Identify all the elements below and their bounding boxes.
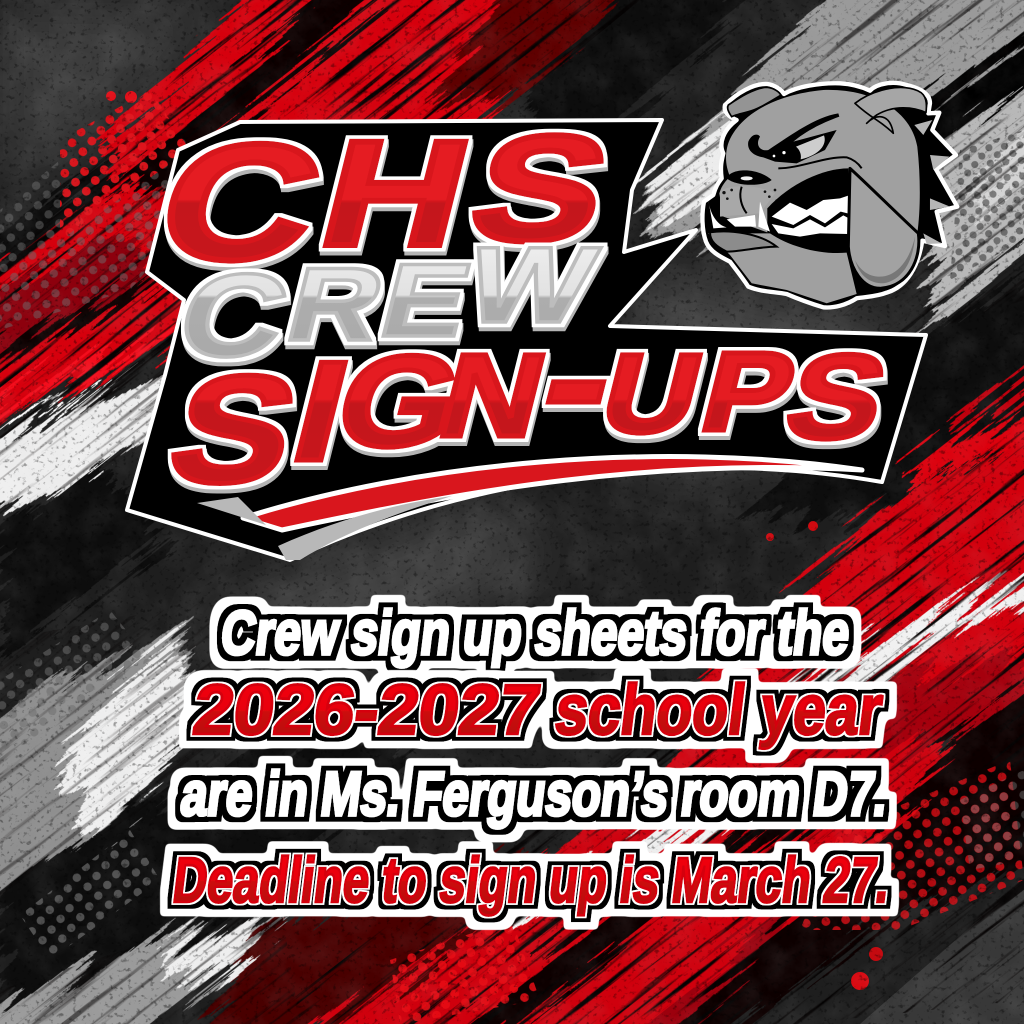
CREW lettering: E	[370, 242, 482, 358]
mascot outline with spiked collar	[702, 83, 957, 307]
CHS lettering: S	[456, 104, 625, 272]
silver swoosh accents	[197, 496, 452, 560]
snout	[720, 186, 775, 217]
SIGN-UPS lettering: G	[323, 329, 476, 474]
bulldog mascot	[702, 83, 957, 307]
CREW lettering: R	[276, 246, 395, 362]
CREW lettering: W	[455, 225, 607, 345]
line 1: Crew sign up sheets for the	[217, 599, 854, 668]
brow	[748, 113, 839, 163]
nose	[727, 170, 772, 185]
SIGN-UPS lettering: -	[523, 283, 636, 473]
message text block	[169, 599, 894, 916]
left ear	[728, 87, 781, 117]
red swoosh under lettering	[243, 457, 862, 530]
upper teeth	[772, 195, 850, 225]
SIGN-UPS lettering: P	[690, 328, 807, 454]
SIGN-UPS lettering: I	[279, 332, 364, 490]
logo backing plate	[127, 120, 926, 560]
line 2: school year: school year	[551, 670, 887, 750]
collar spikes	[914, 120, 950, 244]
eye	[796, 135, 825, 159]
CREW lettering	[166, 225, 607, 381]
CHS lettering	[142, 104, 625, 294]
SIGN-UPS lettering: S	[774, 329, 900, 464]
SIGN-UPS lettering	[154, 283, 911, 515]
CREW lettering: C	[166, 250, 301, 381]
lower lip and chin	[708, 233, 857, 303]
right ear	[855, 87, 926, 133]
line 2: school year	[189, 670, 887, 750]
SIGN-UPS lettering: N	[427, 330, 558, 462]
jowl	[848, 168, 919, 288]
SIGN-UPS lettering: U	[590, 330, 714, 456]
logo: CHS Crew Sign-Ups badge	[127, 104, 926, 560]
fangs	[708, 200, 770, 232]
CHS lettering: C	[142, 110, 339, 294]
whisker dots	[722, 189, 786, 202]
wrinkle lines	[778, 157, 862, 168]
mouth	[767, 168, 851, 253]
head	[719, 90, 920, 237]
SIGN-UPS lettering: S	[154, 345, 314, 515]
line 2: school year: 2026-2027	[189, 670, 545, 750]
lower teeth	[772, 215, 849, 237]
CHS lettering: H	[306, 109, 485, 277]
